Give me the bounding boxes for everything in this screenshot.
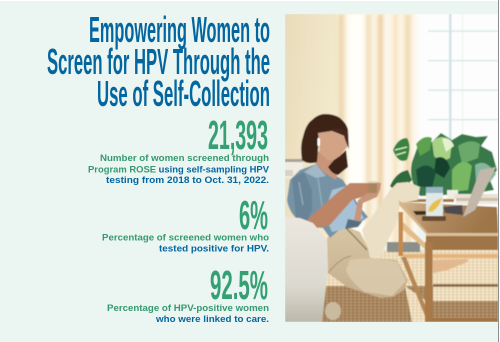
stat: women screened (88, 112, 270, 186)
stat: linked to care: 92.5% (210, 262, 268, 308)
stat: tested positive: 6% (239, 192, 268, 238)
description: women screened (88, 153, 270, 186)
shelf behind the woman (285, 159, 303, 178)
window (417, 14, 498, 214)
neck (314, 150, 338, 180)
hip and folded leg (327, 226, 408, 298)
coffee table (398, 200, 498, 322)
laptop (413, 167, 496, 217)
stat: tested positive (102, 192, 269, 254)
foot (432, 259, 468, 273)
forearms and cup (307, 181, 381, 229)
description: linked to care (107, 303, 269, 325)
sofa (285, 217, 328, 322)
title (47, 9, 270, 114)
hair and head (301, 114, 349, 175)
photo: woman sitting on the floor with a cup beside a table (285, 14, 498, 322)
earbud (318, 138, 320, 146)
plant (390, 133, 497, 199)
description: tested positive (102, 232, 269, 254)
legs (327, 182, 420, 298)
description: women screened: Number of women screened through (100, 153, 269, 164)
left legs and rails (398, 212, 403, 256)
tabletop (399, 202, 498, 233)
glass with lemon (422, 187, 446, 221)
rug (320, 242, 498, 322)
wall (285, 14, 338, 240)
text: 21,393 (208, 112, 268, 158)
description: women screened: Program ROSE using self-sampling HPV (88, 164, 270, 176)
description: tested positive: tested positive for HPV. (159, 244, 269, 254)
text: Use of Self-Collection (97, 73, 270, 114)
description: women screened: testing from 2018 to Oct. 31, 2022. (106, 175, 269, 186)
apron (426, 233, 498, 236)
stat: linked to care (107, 262, 269, 325)
description: tested positive: Percentage of screened women who (102, 232, 269, 244)
raised leg (362, 182, 420, 258)
curtain (337, 14, 418, 244)
text: Empowering Women to (89, 9, 270, 50)
books and table far edge (402, 194, 498, 204)
description: linked to care: who were linked to care. (155, 314, 269, 325)
right page edge (498, 0, 499, 342)
description: linked to care: Percentage of HPV-positive women (107, 303, 269, 314)
shirt (287, 164, 368, 238)
